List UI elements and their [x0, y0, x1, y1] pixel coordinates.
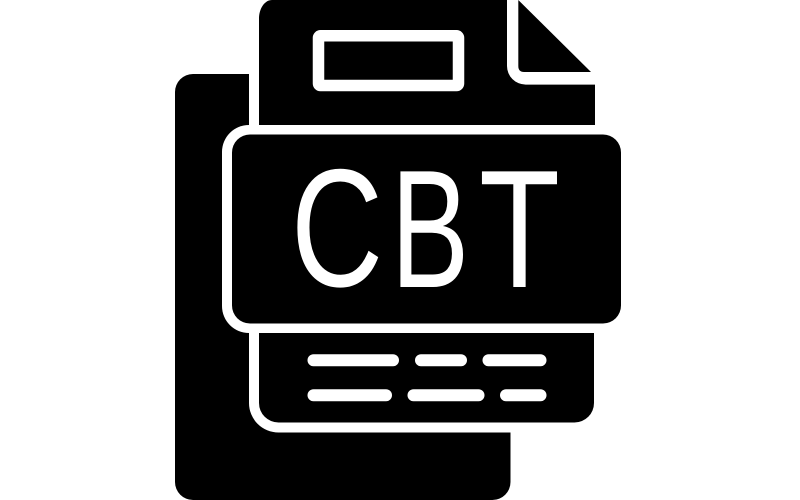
CBT label text — [291, 134, 560, 324]
CBT label text: C — [291, 134, 383, 322]
front page top section — [259, 0, 595, 125]
CBT label text: B — [391, 135, 469, 323]
label banner — [222, 125, 621, 333]
folded corner — [518, 0, 591, 72]
CBT label text: T — [479, 136, 560, 324]
header rectangle outline — [318, 36, 458, 86]
back page — [175, 74, 510, 500]
text lines — [308, 354, 546, 401]
front page lower section — [249, 325, 600, 432]
